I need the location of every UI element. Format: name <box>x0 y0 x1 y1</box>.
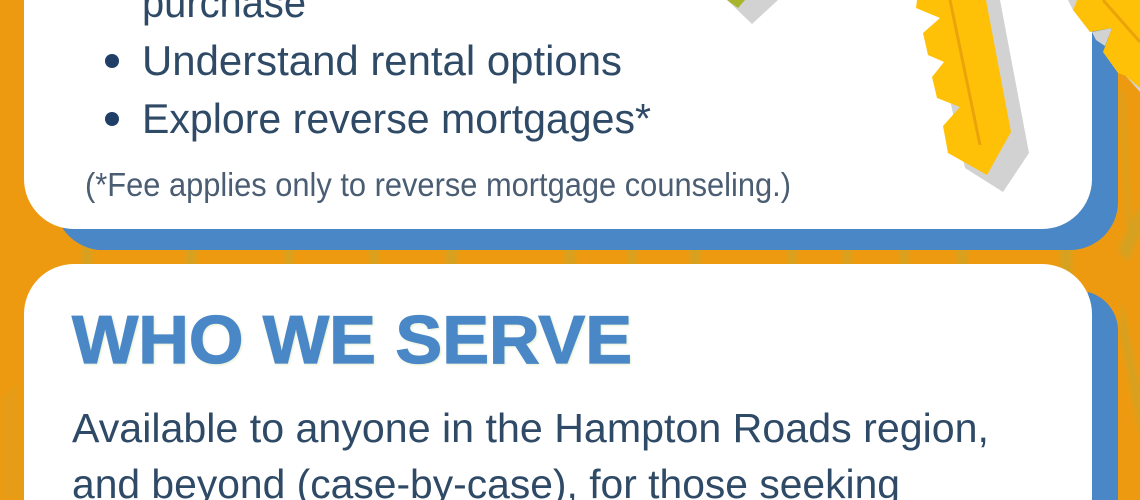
white card: services <box>24 0 1092 229</box>
blue card shadow: services <box>63 0 1118 250</box>
body text: availability <box>72 405 989 500</box>
icon: large yellow key <box>916 0 1029 192</box>
heading: who we serve: WHO WE SERVE <box>72 302 632 378</box>
list item: reverse mortgages: Explore reverse mortgages* <box>142 95 651 142</box>
icon: yellow key at right edge <box>1068 0 1140 92</box>
fee footnote: (*Fee applies only to reverse mortgage counseling.) <box>85 166 791 203</box>
panel: services card <box>24 0 1118 250</box>
list item: rental options: Understand rental options <box>142 37 622 84</box>
white card: who we serve <box>24 264 1092 500</box>
bullet <box>105 54 119 68</box>
body text: availability: Available to anyone in the Hampton Roads region, <box>72 405 989 451</box>
panel: who we serve card <box>24 264 1118 500</box>
bullet <box>105 112 119 126</box>
icon: key tip, centre <box>727 0 778 24</box>
services list <box>105 0 651 142</box>
blue card shadow: who we serve <box>1088 292 1118 500</box>
